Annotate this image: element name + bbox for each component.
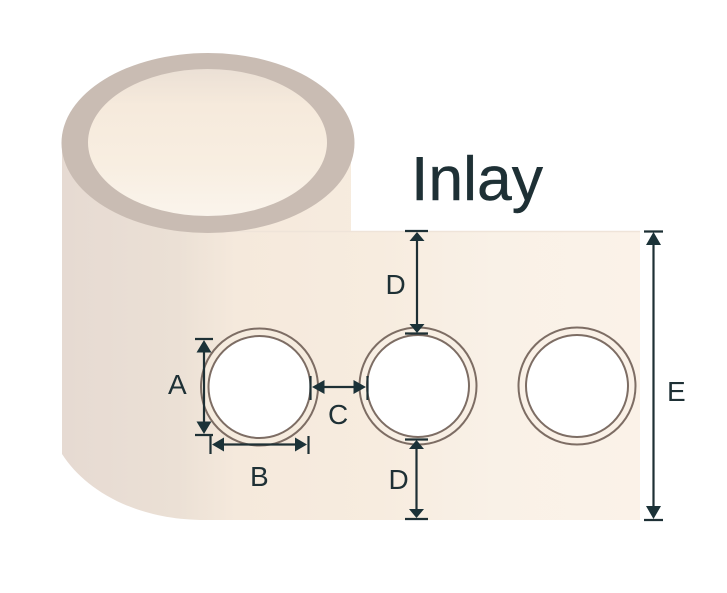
hole 1 <box>201 328 318 446</box>
label D bottom: D <box>388 464 409 495</box>
hole 2 <box>360 328 476 444</box>
title: Inlay <box>411 145 543 214</box>
roll inner opening <box>88 69 327 216</box>
dimension B <box>210 436 308 492</box>
dimension C <box>310 376 368 430</box>
roll top rim <box>62 53 354 233</box>
dimension D top <box>386 231 428 334</box>
label B: B <box>250 461 269 492</box>
rolled inlay strip body <box>62 142 640 520</box>
dimension D bottom <box>388 440 428 519</box>
label C: C <box>328 399 348 430</box>
hole 3 <box>518 328 636 444</box>
label E: E <box>667 376 686 407</box>
dimension A <box>168 339 213 435</box>
label A: A <box>168 369 187 400</box>
label D top: D <box>386 269 406 300</box>
dimension E <box>644 232 686 520</box>
